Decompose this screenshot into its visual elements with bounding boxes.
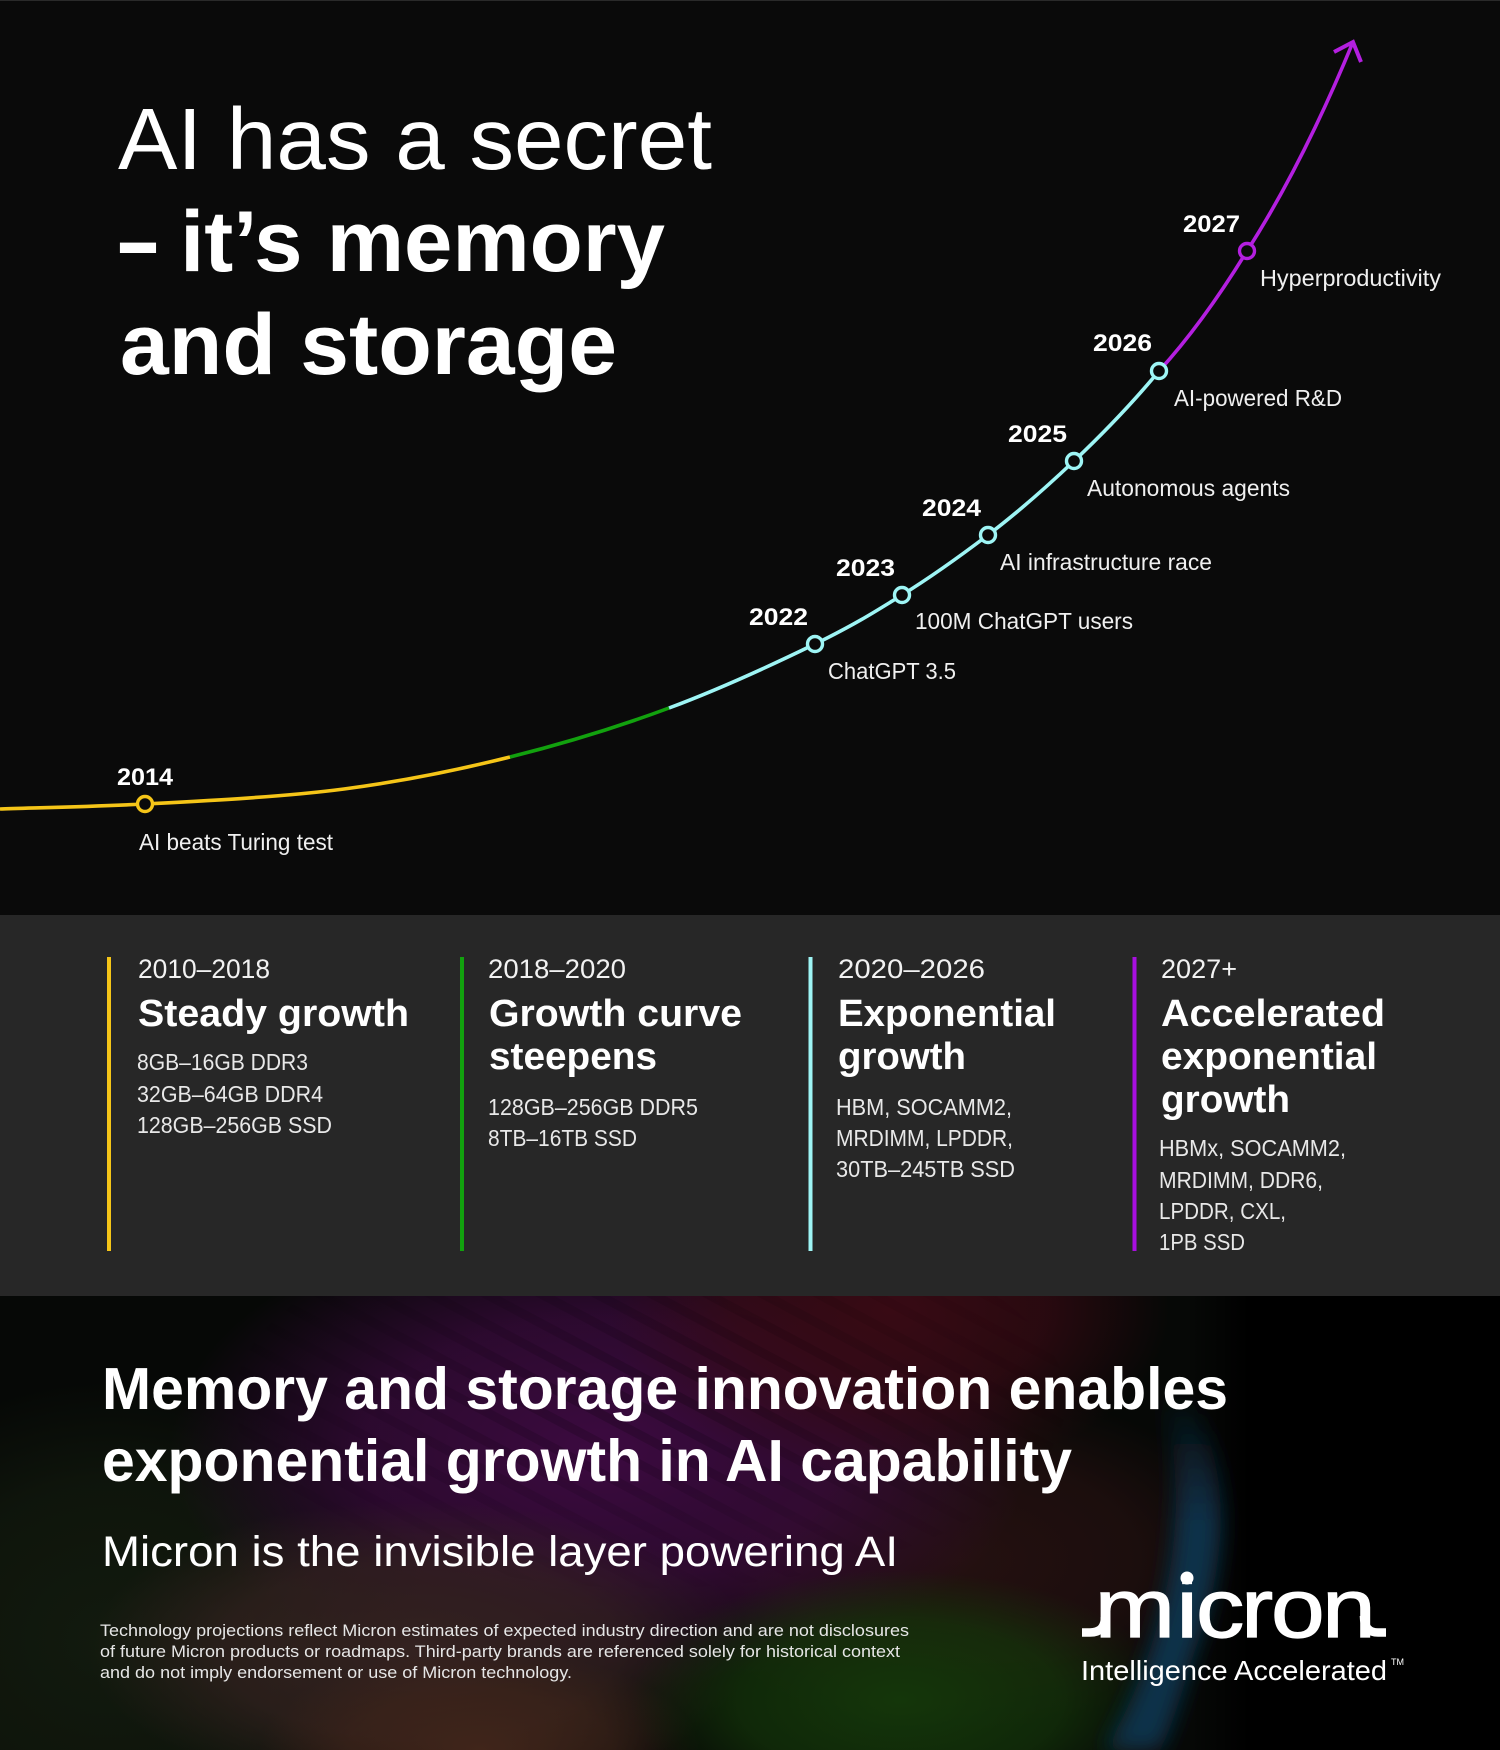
milestone 2023: 100M ChatGPT users <box>915 608 1133 634</box>
milestone 2026: AI-powered R&D <box>1174 385 1342 411</box>
era: 2027+ accelerated exponential growth: growth <box>1161 1079 1290 1121</box>
curve segment: growth curve steepens <box>510 708 669 757</box>
milestone 2014: 2014 <box>117 764 174 791</box>
era: 2018-2020 growth curve steepens: 8TB–16TB SSD <box>488 1125 637 1151</box>
era: 2020-2026 exponential growth: 2020–2026 <box>838 954 985 984</box>
era: 2010-2018 steady growth: 2010–2018 <box>138 954 270 984</box>
title: it’s memory <box>156 194 665 290</box>
disclaimer: and do not imply endorsement or use of Micron technology. <box>100 1663 572 1682</box>
milestone 2026: 2026 <box>1093 330 1152 357</box>
era: 2027+ accelerated exponential growth: 1PB SSD <box>1159 1229 1245 1255</box>
growth curve chart <box>0 42 1441 855</box>
milestone 2023: 2023 <box>836 555 895 582</box>
disclaimer: Technology projections reflect Micron estimates of expected industry direction and are not disclosures <box>100 1621 909 1640</box>
panel: closing message <box>0 1296 1500 1750</box>
curve segment: accelerated exponential growth <box>1159 42 1353 371</box>
era: 2020-2026 exponential growth: growth <box>838 1036 966 1078</box>
era: 2018-2020 growth curve steepens: Growth curve <box>489 993 742 1035</box>
title: AI has a secret <box>118 91 712 188</box>
milestone 2022: 2022 <box>749 604 808 631</box>
subheading: Micron is the invisible layer powering AI <box>102 1528 898 1576</box>
milestone 2024 <box>922 495 1212 575</box>
milestone 2014: AI beats Turing test <box>139 829 334 855</box>
era: 2018-2020 growth curve steepens <box>460 954 742 1251</box>
curve segment: steady growth <box>0 757 510 809</box>
milestone 2027: 2027 <box>1183 211 1240 238</box>
milestone 2025: Autonomous agents <box>1087 475 1290 501</box>
milestone 2024: 2024 <box>922 495 982 522</box>
era: 2027+ accelerated exponential growth: Accelerated <box>1161 993 1385 1035</box>
gradient background <box>0 1296 1500 1750</box>
panel: timeline background <box>0 0 1500 915</box>
milestone 2025: 2025 <box>1008 421 1067 448</box>
era: 2020-2026 exponential growth: MRDIMM, LPDDR, <box>836 1125 1013 1151</box>
headline: exponential growth in AI capability <box>102 1428 1072 1494</box>
curve segment: exponential growth <box>669 371 1159 708</box>
era: 2018-2020 growth curve steepens: 2018–2020 <box>488 954 626 984</box>
era: 2020-2026 exponential growth: HBM, SOCAMM2, <box>836 1094 1012 1120</box>
milestone 2022 <box>749 604 956 684</box>
title: and storage <box>120 297 617 393</box>
milestone 2027: Hyperproductivity <box>1260 265 1441 291</box>
era: 2027+ accelerated exponential growth: 2027+ <box>1161 954 1237 984</box>
milestone 2022: ChatGPT 3.5 <box>828 658 956 684</box>
milestone 2025 <box>1008 421 1290 501</box>
headline: Memory and storage innovation enables <box>102 1356 1228 1422</box>
panel: growth eras <box>0 915 1500 1296</box>
era: 2010-2018 steady growth: 32GB–64GB DDR4 <box>137 1081 323 1107</box>
era: 2020-2026 exponential growth <box>808 954 1056 1251</box>
logo: Micron: micron <box>1095 1562 1376 1656</box>
era: 2018-2020 growth curve steepens: steepens <box>489 1036 657 1078</box>
title <box>118 91 712 393</box>
milestone 2014 <box>117 764 334 855</box>
milestone 2024: AI infrastructure race <box>1000 549 1212 575</box>
era: 2020-2026 exponential growth: 30TB–245TB SSD <box>836 1156 1015 1182</box>
era: 2010-2018 steady growth <box>107 954 409 1251</box>
era: 2010-2018 steady growth: 8GB–16GB DDR3 <box>137 1049 308 1075</box>
milestone 2023 <box>836 555 1133 634</box>
era: 2020-2026 exponential growth: Exponential <box>838 993 1056 1035</box>
era: 2010-2018 steady growth: Steady growth <box>138 993 409 1035</box>
milestone 2026 <box>1093 330 1342 411</box>
era: 2027+ accelerated exponential growth <box>1132 954 1385 1255</box>
era: 2027+ accelerated exponential growth: HBMx, SOCAMM2, <box>1159 1135 1346 1161</box>
milestone 2027 <box>1183 211 1441 291</box>
era: 2027+ accelerated exponential growth: LPDDR, CXL, <box>1159 1198 1286 1224</box>
disclaimer <box>100 1621 909 1682</box>
tagline: TM <box>1391 1657 1404 1667</box>
era: 2018-2020 growth curve steepens: 128GB–256GB DDR5 <box>488 1094 698 1120</box>
era: 2027+ accelerated exponential growth: MRDIMM, DDR6, <box>1159 1167 1323 1193</box>
headline <box>102 1356 1228 1494</box>
era: 2027+ accelerated exponential growth: exponential <box>1161 1036 1377 1078</box>
title: – <box>120 207 156 279</box>
disclaimer: of future Micron products or roadmaps. Third-party brands are referenced solely for historical context <box>100 1642 900 1661</box>
arrow head <box>1334 42 1361 62</box>
era: 2010-2018 steady growth: 128GB–256GB SSD <box>137 1112 332 1138</box>
tagline: Intelligence Accelerated <box>1081 1655 1387 1686</box>
